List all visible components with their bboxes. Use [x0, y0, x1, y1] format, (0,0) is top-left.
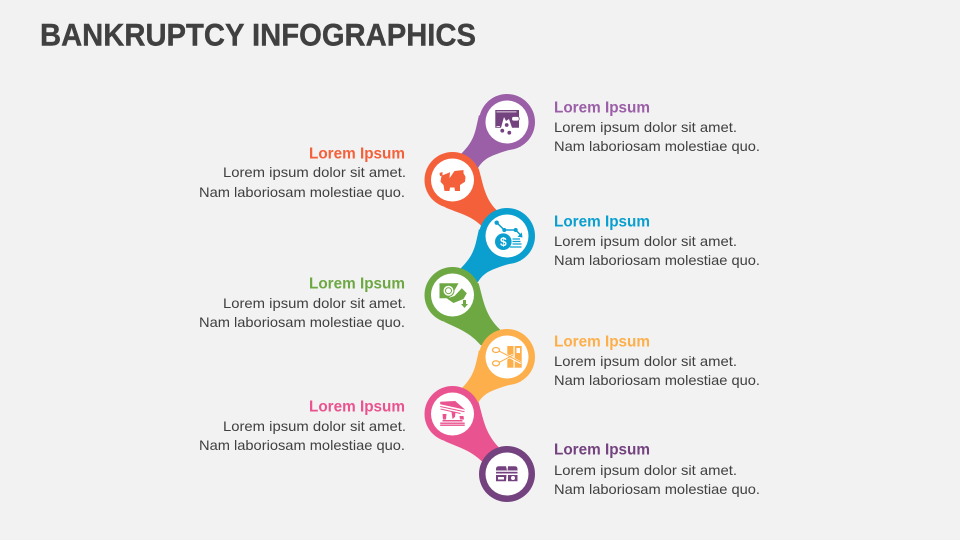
panel: orange pin step 2 [424, 152, 502, 230]
title: BANKRUPTCY INFOGRAPHICS [40, 16, 476, 52]
text block: blue step: Nam laboriosam molestiae quo. [554, 252, 760, 268]
text block: blue step: Lorem Ipsum [554, 214, 650, 230]
text block: blue step: Lorem ipsum dolor sit amet. [554, 233, 737, 249]
text block: orange step: Nam laboriosam molestiae quo. [199, 184, 405, 200]
text block: blue step [554, 214, 760, 268]
text block: dark purple step: Lorem Ipsum [554, 442, 650, 458]
text block: yellow step: Lorem Ipsum [554, 334, 650, 350]
text block: purple step: Lorem ipsum dolor sit amet. [554, 119, 737, 135]
panel: dark purple pin step 7 [479, 446, 535, 502]
panel: blue pin step 3 [457, 208, 535, 286]
icon: broken piggy bank [440, 170, 466, 191]
icon: hand holding banknote [440, 283, 468, 308]
text block: yellow step: Nam laboriosam molestiae quo. [554, 372, 760, 388]
text block: pink step [199, 398, 406, 453]
text block: dark purple step: Lorem ipsum dolor sit amet. [554, 462, 737, 478]
text block: yellow step [554, 334, 760, 388]
icon: scissors cutting cards [492, 346, 522, 368]
text block: green step: Nam laboriosam molestiae quo. [199, 314, 405, 330]
text block: purple step [554, 100, 760, 154]
panel: green pin step 4 [424, 267, 504, 350]
panel: purple pin step 1 [457, 94, 535, 172]
text block: purple step: Nam laboriosam molestiae quo. [554, 138, 760, 154]
text block: orange step [199, 146, 406, 200]
text block: dark purple step [554, 442, 760, 497]
text block: orange step: Lorem Ipsum [309, 146, 405, 162]
icon: falling chart and dollar coin: $ [500, 235, 507, 249]
icon: wallet with falling coins [495, 110, 519, 135]
text block: purple step: Lorem Ipsum [554, 100, 650, 116]
panel: yellow pin step 5 [457, 329, 535, 407]
text block: pink step: Lorem ipsum dolor sit amet. [223, 418, 406, 434]
text block: green step: Lorem Ipsum [309, 276, 405, 292]
icon: collapsing bank building [440, 401, 465, 426]
icon: broken credit cards [496, 466, 518, 481]
text block: dark purple step: Nam laboriosam molestiae quo. [554, 481, 760, 497]
text block: green step: Lorem ipsum dolor sit amet. [223, 295, 406, 311]
text block: pink step: Lorem Ipsum [309, 398, 405, 416]
text block: orange step: Lorem ipsum dolor sit amet. [223, 164, 406, 180]
panel: pink pin step 6 [424, 386, 504, 469]
text block: pink step: Nam laboriosam molestiae quo. [199, 437, 405, 453]
text block: green step [199, 276, 406, 330]
text block: yellow step: Lorem ipsum dolor sit amet. [554, 353, 737, 369]
